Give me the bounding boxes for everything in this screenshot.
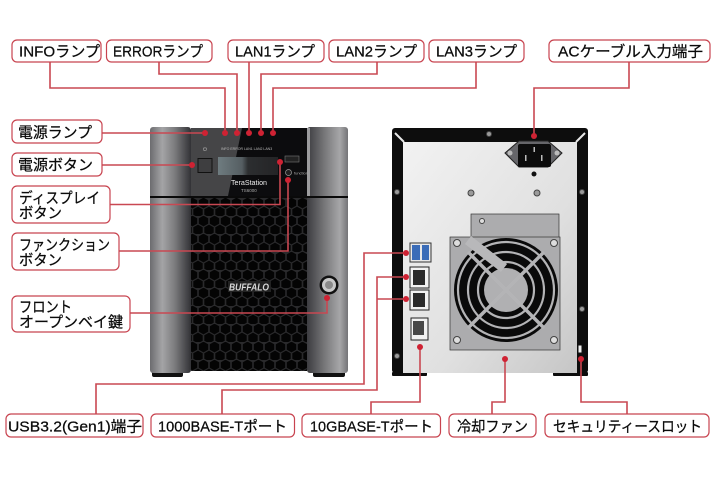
label: function button: ファンクション (19, 237, 110, 254)
USB ports (410, 243, 431, 262)
control panel (191, 128, 310, 196)
label: 10GBASE-T port: 10GBASE-Tポート (310, 418, 433, 436)
label: security slot: セキュリティースロット (553, 418, 702, 436)
label: INFO lamp: INFOランプ (19, 44, 100, 60)
label: front bay lock: フロント (19, 299, 72, 316)
NAS front view (150, 127, 348, 377)
security slot (578, 345, 582, 353)
control panel: ⏻ (203, 147, 207, 153)
label: front bay lock (12, 296, 130, 332)
label: display button: ディスプレイ (19, 189, 100, 207)
label: display button: ボタン (19, 205, 62, 222)
label: LAN1 lamp (228, 40, 324, 62)
label: USB port (6, 414, 143, 437)
leader lines (50, 62, 629, 414)
label: AC cable inlet: ACケーブル入力端子 (558, 42, 703, 60)
label: LAN2 lamp (329, 40, 424, 62)
label: power lamp (12, 120, 102, 143)
NAS rear view (392, 128, 588, 376)
control panel: TeraStation (231, 178, 267, 187)
label: cooling fan: 冷却ファン (457, 418, 528, 436)
label: AC cable inlet (549, 40, 710, 62)
label: display button (12, 186, 110, 223)
screws (394, 132, 584, 358)
label: LAN3 lamp (429, 40, 524, 62)
label: LAN3 lamp: LAN3ランプ (436, 44, 517, 60)
label: 1000BASE-T port: 1000BASE-Tポート (158, 418, 287, 436)
control panel: INFO ERROR LAN1 LAN2 LAN3 (221, 147, 272, 151)
label: INFO lamp (12, 40, 101, 62)
1000BASE-T ports (410, 267, 429, 310)
BUFFALO logo: BUFFALO (229, 282, 269, 294)
10GBASE-T port (411, 318, 428, 340)
label: front bay lock: オープンベイ鍵 (19, 314, 123, 331)
AC inlet (505, 141, 562, 167)
cooling fan (450, 214, 560, 350)
label: 10GBASE-T port (302, 414, 440, 437)
label: power lamp: 電源ランプ (18, 124, 92, 142)
front grille (191, 198, 307, 371)
label: ERROR lamp: ERRORランプ (113, 44, 203, 60)
label: LAN2 lamp: LAN2ランプ (336, 44, 417, 60)
label: function button (12, 233, 119, 270)
front key lock (320, 276, 338, 294)
label: power button: 電源ボタン (18, 157, 93, 174)
connector dots (189, 130, 584, 362)
label: security slot (545, 414, 709, 437)
label: cooling fan (449, 414, 536, 437)
label: LAN1 lamp: LAN1ランプ (235, 44, 315, 60)
label: power button (12, 153, 102, 176)
label: 1000BASE-T port (151, 414, 294, 437)
label: function button: ボタン (19, 252, 62, 269)
label: USB port: USB3.2(Gen1)端子 (8, 418, 142, 436)
control panel: TS6000 (241, 188, 257, 193)
control panel: function (294, 170, 308, 176)
